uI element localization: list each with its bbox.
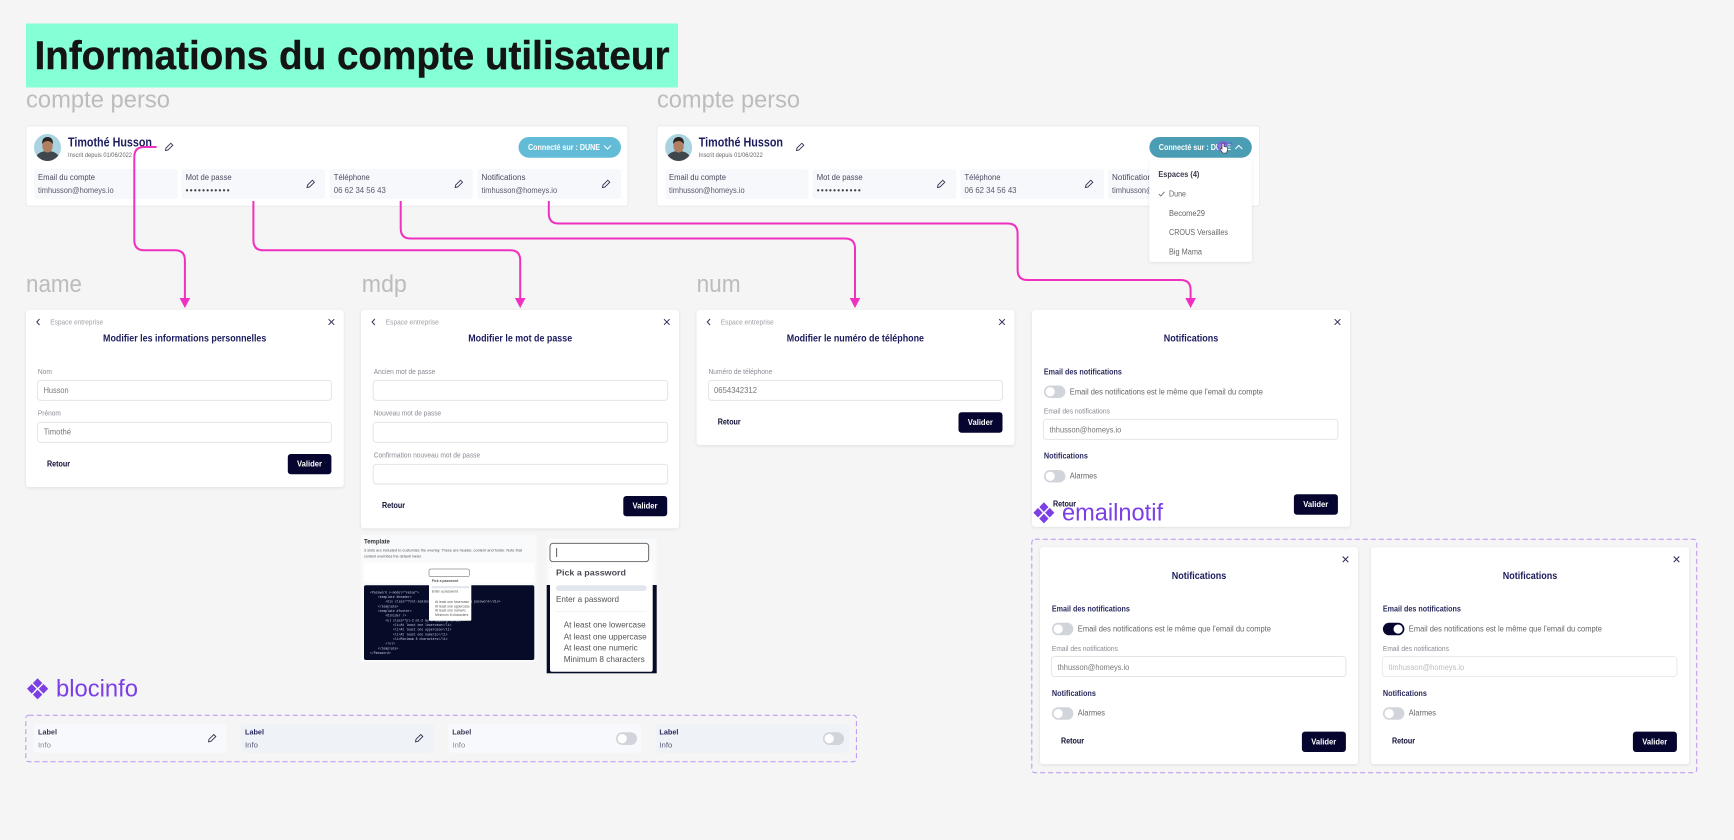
heading: mdp: mdp	[362, 271, 407, 298]
info cell: phone	[330, 169, 473, 199]
toggle: same email off	[1052, 623, 1272, 635]
toggle: alarms	[1044, 470, 1097, 482]
code block: <li>At least one uppercase</li>	[393, 628, 452, 632]
code block: <Divider />	[386, 614, 406, 618]
icon: close	[999, 319, 1005, 325]
component label: blocinfo: blocinfo	[56, 676, 138, 702]
mini password popover: Enter a password	[432, 590, 458, 594]
popover panel: At least one numeric	[564, 643, 638, 653]
subheading: email: Email des notifications	[1044, 367, 1122, 376]
icon: back	[37, 319, 40, 325]
subheading: notifications: Notifications	[1383, 689, 1427, 698]
toggle: same email on: Email des notifications est le même que l'email du compte	[1409, 625, 1603, 634]
info block: toggle light: Info	[452, 742, 465, 749]
info block: pencil dark: Info	[245, 742, 258, 749]
validate button	[623, 496, 667, 516]
info cell: notifications: timhusson@homeys.io	[482, 186, 558, 195]
info block: pencil light: Info	[38, 742, 51, 749]
mini password popover	[429, 569, 471, 621]
modal title: Modifier les informations personnelles	[103, 334, 267, 345]
info cell: phone: 06 62 34 56 43	[964, 186, 1017, 195]
validate button: Valider	[632, 502, 658, 511]
field: phone: Numéro de téléphone	[708, 369, 772, 376]
toggle: alarms: Alarmes	[1409, 709, 1436, 718]
icon: close	[664, 319, 670, 325]
connected button active: Connecté sur : DUNE	[1159, 143, 1232, 152]
toggle: alarms	[1383, 707, 1436, 720]
field: disabled email	[1382, 646, 1677, 677]
info cell: notifications	[477, 169, 621, 199]
modal: notifications toggle off	[1040, 547, 1358, 764]
icon: click cursor: click	[1224, 141, 1233, 146]
code block: <li>At least one numeric</li>	[393, 632, 448, 636]
validate button: Valider	[297, 460, 322, 469]
validate button: Valider	[968, 418, 993, 427]
popover panel: Pick a password	[556, 568, 626, 578]
code block: <Password v-model="value">	[370, 590, 419, 594]
breadcrumb: Espace entreprise	[721, 320, 774, 326]
info cell: email	[665, 169, 809, 199]
field: nom: Husson	[44, 386, 69, 395]
icon: click cursor	[1217, 141, 1233, 153]
registration date: Inscrit depuis 01/06/2022	[699, 152, 763, 159]
icon: close	[1343, 556, 1348, 562]
heading: compte perso left: compte perso	[26, 86, 170, 114]
validate button	[1302, 732, 1346, 752]
title: Informations du compte utilisateur	[34, 34, 670, 78]
validate button	[288, 454, 331, 474]
popover panel: At least one uppercase	[564, 631, 647, 641]
dashed group: info blocks	[26, 715, 856, 762]
arrow: phone to modal	[401, 201, 860, 308]
component label: emailnotif: emailnotif	[1062, 500, 1163, 527]
toggle: same email off: Email des notifications est le même que l'email du compte	[1078, 625, 1272, 634]
toggle: alarms	[1052, 707, 1105, 720]
validate button: Valider	[1642, 737, 1667, 746]
panel: account card with open menu	[657, 126, 1260, 262]
code block: </template>	[378, 604, 399, 608]
code block: <ul class="pl-2 ml-2 my-0 leading-normal">	[386, 618, 465, 622]
modal title: Notifications	[1164, 334, 1219, 345]
arrow: password to modal	[253, 201, 526, 308]
info cell: password: Mot de passe	[817, 173, 863, 182]
info cell: email: timhusson@homeys.io	[669, 186, 745, 195]
info block: pencil light: Label	[38, 727, 57, 736]
screenshot: password popover zoom	[547, 539, 657, 673]
breadcrumb: Espace entreprise	[50, 320, 103, 326]
toggle: alarms: Alarmes	[1078, 709, 1105, 718]
field: nom: Nom	[38, 369, 52, 376]
toggle: same email on	[1383, 623, 1603, 635]
back link: Retour	[1061, 737, 1084, 746]
info cell: password: •••••••••••	[817, 186, 861, 195]
field: notification email	[1051, 646, 1346, 677]
mini password popover: At least one lowercase	[435, 600, 469, 604]
back link: Retour	[1392, 737, 1415, 746]
validate button	[1633, 732, 1677, 752]
heading: num: num	[697, 271, 741, 298]
dropdown menu: Espaces (4)	[1158, 170, 1200, 179]
info cell: email	[34, 169, 178, 199]
code block: <div class="font-semibold text-xm mb-4">Pick a password</div>	[386, 600, 501, 604]
dropdown menu: Big Mama	[1169, 248, 1203, 257]
modal title: Modifier le numéro de téléphone	[787, 334, 924, 345]
code block: <li>Minimum 8 characters</li>	[393, 637, 448, 641]
back link: Retour	[1053, 499, 1076, 508]
field: new password	[373, 411, 668, 442]
field: old password	[373, 369, 668, 400]
field: phone: 0654342312	[714, 386, 758, 395]
back link: Retour	[718, 417, 741, 426]
info block: toggle dark: Info	[659, 742, 673, 749]
field: notification email: thhusson@homeys.io	[1058, 663, 1130, 672]
info cell: phone: 06 62 34 56 43	[334, 186, 386, 195]
icon: back	[372, 319, 375, 325]
mini password popover: Pick a password	[432, 579, 458, 583]
user name: Timothé Husson	[699, 136, 783, 150]
modal title: Modifier le mot de passe	[468, 334, 573, 345]
field: old password: Ancien mot de passe	[374, 369, 435, 376]
icon: close	[1335, 319, 1340, 325]
subheading: notifications: Notifications	[1044, 452, 1088, 461]
mini password popover: At least one uppercase	[435, 604, 470, 608]
field: prenom: Timothé	[44, 428, 72, 437]
modal: phone	[697, 310, 1014, 445]
password input	[550, 543, 649, 562]
code block: <li>At least one lowercase</li>	[393, 623, 452, 627]
icon: edit name	[796, 143, 804, 150]
registration date: Inscrit depuis 01/06/2022	[68, 152, 132, 159]
field: notification email: thhusson@homeys.io	[1050, 426, 1122, 435]
dropdown menu: CROUS Versailles	[1169, 228, 1228, 237]
info block: toggle dark	[655, 724, 849, 753]
info cell: notifications: Notifications	[482, 173, 526, 182]
code block: </ul>	[386, 642, 395, 646]
info cell: phone: Téléphone	[964, 173, 1001, 182]
field: phone	[708, 369, 1002, 400]
info block: pencil dark: Label	[245, 727, 264, 736]
field: notification email	[1043, 409, 1338, 439]
subheading: notifications: Notifications	[1052, 689, 1096, 698]
icon: avatar	[34, 134, 61, 161]
field: disabled email: Email des notifications	[1383, 646, 1449, 653]
modal title: Notifications	[1503, 571, 1558, 582]
panel: account card	[26, 126, 628, 206]
field: notification email: Email des notifications	[1044, 409, 1110, 416]
field: confirm password	[373, 453, 668, 484]
icon: edit name	[166, 143, 173, 150]
popover panel: Enter a password	[556, 594, 619, 604]
field: notification email: Email des notifications	[1052, 646, 1118, 653]
back link: Retour	[382, 501, 405, 510]
info cell: email: timhusson@homeys.io	[38, 186, 114, 195]
code block: </Password>	[370, 651, 391, 655]
heading: name: name	[26, 271, 82, 298]
field: confirm password: Confirmation nouveau mot de passe	[374, 453, 480, 460]
dropdown menu: Become29	[1169, 209, 1206, 218]
template heading: Template	[364, 539, 391, 545]
field: prenom: Prénom	[38, 411, 61, 418]
code block: </template>	[378, 646, 399, 650]
modal title: Notifications	[1172, 571, 1227, 582]
info cell: notifications: timhusson@homeys.io	[1112, 186, 1188, 195]
heading: compte perso right: compte perso	[657, 86, 800, 114]
template description: 3 slots are included to customize the overlay. These are header, content and footer. Note that	[364, 548, 523, 553]
info block: toggle light: Label	[452, 727, 471, 736]
validate button: Valider	[1311, 737, 1336, 746]
screenshot: password template docs	[361, 535, 537, 662]
popover panel: At least one lowercase	[564, 620, 646, 630]
field: new password: Nouveau mot de passe	[374, 411, 441, 418]
info cell: phone	[960, 169, 1104, 199]
popover panel: Minimum 8 characters	[564, 654, 645, 664]
mini password popover: At least one numeric	[435, 609, 466, 613]
dropdown menu	[1149, 160, 1252, 262]
info cell: notifications: Notifications	[1112, 173, 1156, 182]
info cell: email: Email du compte	[38, 173, 96, 182]
breadcrumb: Espace entreprise	[386, 320, 439, 326]
modal: name	[26, 310, 344, 487]
info block: pencil light	[34, 724, 226, 753]
info cell: email: Email du compte	[669, 173, 727, 182]
validate button	[958, 412, 1002, 433]
title	[26, 24, 678, 88]
code block: <template #footer>	[378, 609, 412, 613]
arrow: notifications to modal	[549, 201, 1196, 308]
modal: notifications	[1032, 310, 1350, 527]
user name: Timothé Husson	[68, 136, 152, 150]
icon: back	[707, 319, 710, 325]
info cell: password: •••••••••••	[186, 186, 230, 195]
toggle: same email	[1044, 386, 1264, 398]
code block: <template #header>	[378, 595, 412, 599]
popover panel	[550, 562, 653, 672]
toggle: same email: Email des notifications est le même que l'email du compte	[1070, 387, 1264, 396]
info block: toggle light	[448, 724, 641, 753]
info block: toggle dark: Label	[659, 727, 678, 736]
info cell: notifications	[1108, 169, 1252, 199]
info block: pencil dark	[241, 724, 434, 753]
info cell: password	[181, 169, 325, 199]
arrow: name to modal	[134, 147, 190, 308]
connected button active	[1149, 137, 1252, 158]
icon: avatar	[665, 134, 692, 161]
info cell: phone: Téléphone	[334, 173, 370, 182]
connected button	[518, 137, 621, 158]
modal: password	[361, 310, 679, 528]
connected button: Connecté sur : DUNE	[528, 143, 601, 152]
back link: Retour	[47, 459, 70, 468]
mini password popover: Minimum 8 characters	[435, 613, 469, 617]
template description: content overrides the default meter.	[364, 553, 422, 558]
field: disabled email: timhusson@homeys.io	[1389, 663, 1465, 672]
validate button: Valider	[1303, 500, 1328, 509]
validate button	[1294, 494, 1338, 515]
template description	[364, 548, 523, 558]
subheading: email: Email des notifications	[1383, 605, 1461, 614]
field: nom	[37, 369, 331, 400]
info cell: password	[813, 169, 956, 199]
field: prenom	[37, 411, 331, 442]
dropdown menu: Dune	[1169, 190, 1186, 199]
toggle: alarms: Alarmes	[1070, 471, 1097, 480]
subheading: email: Email des notifications	[1052, 605, 1130, 614]
info cell: password: Mot de passe	[186, 173, 232, 182]
modal: notifications toggle on	[1371, 547, 1689, 764]
code block	[364, 585, 534, 660]
icon: close	[329, 319, 334, 325]
dashed group: notification variants	[1032, 539, 1697, 773]
icon: close	[1674, 556, 1679, 562]
